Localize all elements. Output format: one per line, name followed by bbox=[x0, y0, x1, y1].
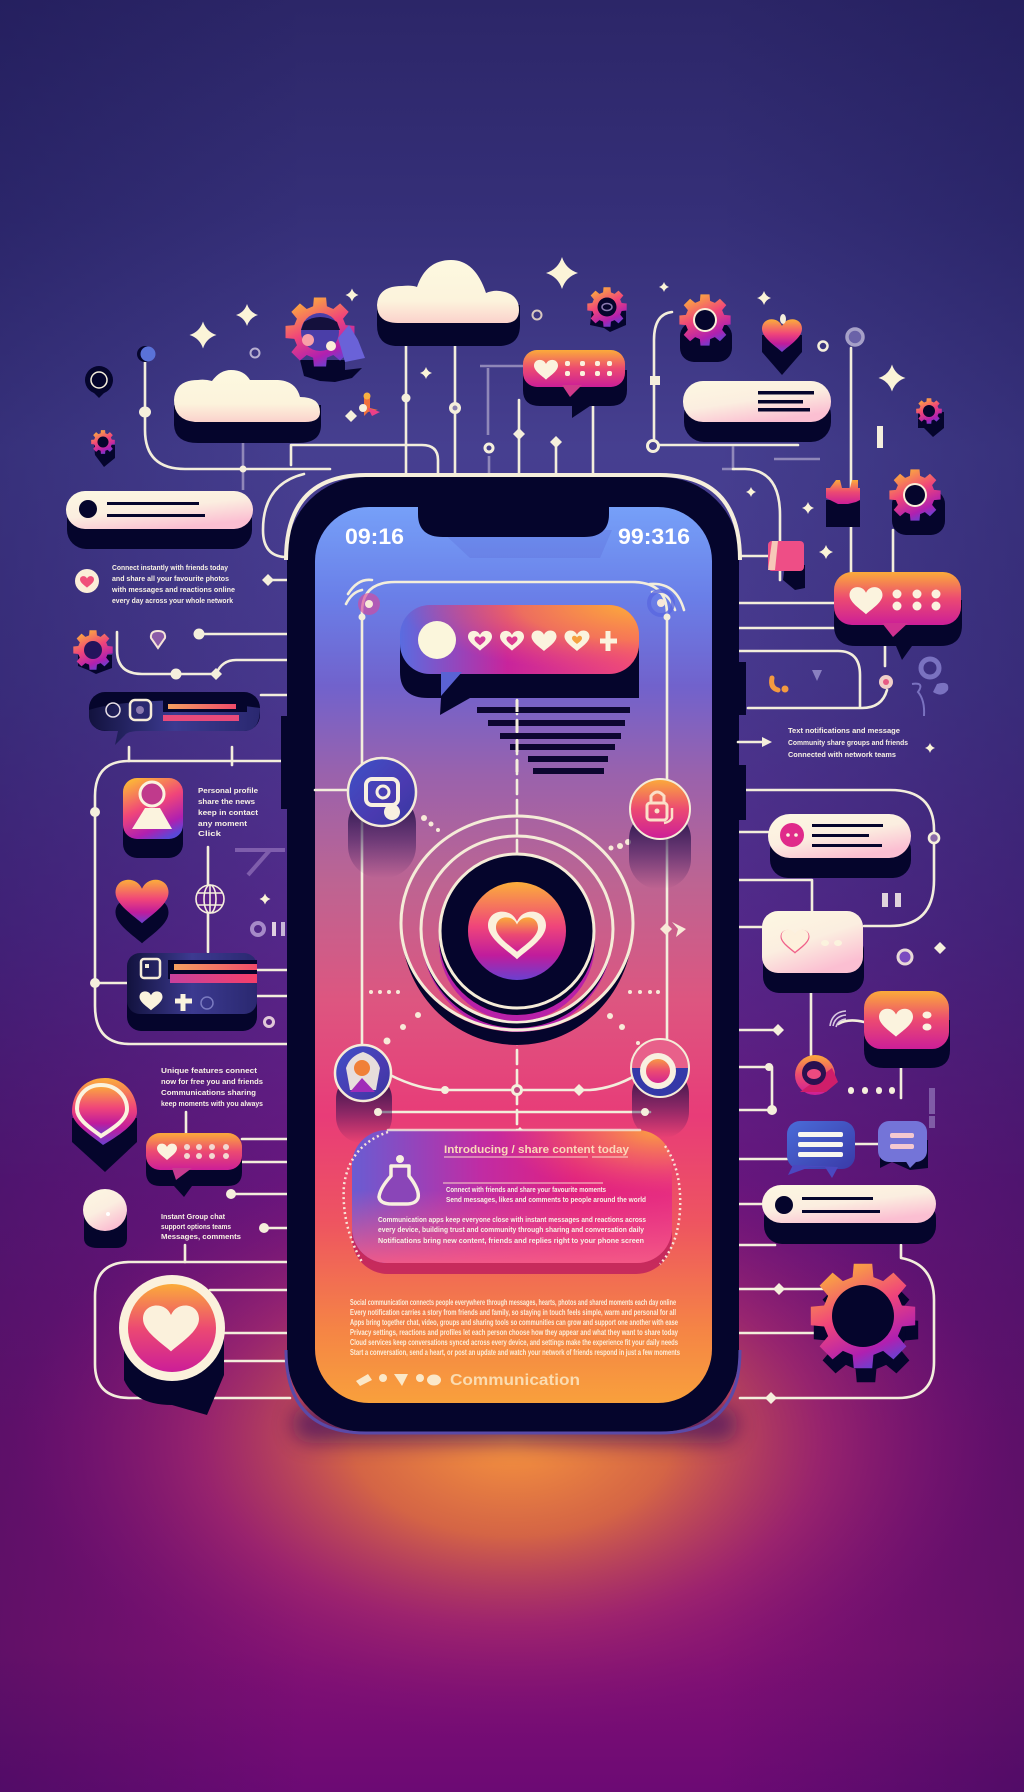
screen paragraph text: Privacy settings, reactions and profiles let each person choose how they appear and what they want to share today bbox=[350, 1328, 679, 1337]
line nodes on screen bbox=[374, 1084, 649, 1139]
small gear: far right bbox=[916, 398, 944, 437]
pill: top left bbox=[66, 491, 253, 549]
text block: left lower: Unique features connect bbox=[161, 1066, 257, 1075]
phone screen bbox=[315, 507, 712, 1403]
text block: left profile: Personal profile bbox=[198, 786, 258, 795]
dots row bbox=[848, 1087, 895, 1094]
icon: heart badge bbox=[75, 569, 99, 593]
text block: left upper bbox=[111, 563, 235, 605]
card body text: every device, building trust and community through sharing and conversation daily bbox=[378, 1225, 645, 1234]
screen paragraph text: Apps bring together chat, video, groups and sharing tools so communities can grow and support one another with ease bbox=[350, 1318, 678, 1327]
text block: left lower bbox=[161, 1066, 263, 1108]
screen frame lines bbox=[315, 580, 684, 1150]
node: profile bbox=[335, 1045, 392, 1143]
node: lock bbox=[629, 779, 691, 889]
information card bbox=[344, 1130, 680, 1274]
grey bars bbox=[929, 1088, 935, 1128]
text block: left bottom: support options teams bbox=[161, 1222, 231, 1231]
phone body bbox=[281, 475, 746, 1433]
gear: left bbox=[73, 630, 113, 674]
small decorations: top left bbox=[85, 346, 380, 422]
ring: right bbox=[898, 942, 946, 964]
circuit lines: left middle and bottom bbox=[90, 747, 290, 1398]
cloud: left bbox=[174, 370, 321, 443]
icon: wifi waves bbox=[830, 1011, 846, 1027]
pill: bottom right bbox=[762, 1185, 936, 1244]
big heart badge bbox=[119, 1275, 225, 1415]
screen footer icons bbox=[356, 1374, 441, 1386]
text block: right: Text notifications and message bbox=[788, 726, 900, 735]
circuit lines: right middle and bottom bbox=[738, 790, 939, 1404]
grey seven mark bbox=[235, 850, 285, 875]
small ring: left bbox=[264, 1018, 274, 1026]
heart card bbox=[762, 911, 864, 993]
gear with magnifier: top left bbox=[286, 298, 365, 382]
text block: left profile: any moment bbox=[198, 819, 248, 828]
screen paragraph text: Social communication connects people everywhere through messages, hearts, photos and shared moments each day online bbox=[350, 1298, 676, 1307]
text block: left lower: keep moments with you always bbox=[161, 1099, 263, 1108]
blue chat bubble bbox=[787, 1121, 855, 1178]
status time right: 99:316 bbox=[618, 524, 690, 549]
screen paragraph text: Cloud services keep conversations synced across every device, and settings make the experience fit your daily needs bbox=[350, 1338, 678, 1347]
text block: left lower: Communications sharing bbox=[161, 1088, 256, 1097]
arrow bbox=[738, 737, 772, 747]
text block: left profile: Click bbox=[198, 829, 222, 838]
main chat bubble bbox=[400, 605, 639, 715]
circuit lines: top right bbox=[513, 312, 893, 708]
periwinkle chat bubble bbox=[878, 1121, 928, 1170]
gear: right bbox=[889, 469, 945, 535]
dotted guide lines bbox=[369, 815, 686, 1045]
chat text lines bbox=[477, 700, 630, 780]
heart bubble: right bbox=[834, 572, 962, 660]
bars bbox=[882, 893, 901, 907]
card body text bbox=[378, 1185, 646, 1245]
avatar tile bbox=[123, 778, 183, 858]
text block: left profile: keep in contact bbox=[198, 808, 259, 817]
text block: right: Community share groups and friends bbox=[788, 738, 908, 747]
card title: Introducing / share content today bbox=[444, 1144, 630, 1156]
sparkles bbox=[190, 257, 935, 904]
heart: top right bbox=[762, 314, 802, 375]
text block: left bottom bbox=[161, 1212, 241, 1241]
icon: globe bbox=[196, 885, 224, 913]
icon: location pin small bbox=[151, 631, 165, 648]
text block: left upper: with messages and reactions online bbox=[111, 585, 235, 594]
pink tab bbox=[768, 541, 805, 590]
text block: left bottom: Instant Group chat bbox=[161, 1212, 225, 1221]
card body text: Connect with friends and share your favourite moments bbox=[446, 1185, 606, 1194]
circuit lines: top left bbox=[117, 346, 530, 695]
screen paragraph text: Every notification carries a story from friends and family, so staying in touch feels simple, warm and personal for all bbox=[350, 1308, 676, 1317]
text block: right: Connected with network teams bbox=[788, 750, 896, 759]
gear pin bbox=[795, 1055, 838, 1095]
heart bubble: left bbox=[146, 1133, 242, 1197]
text block: left profile bbox=[198, 786, 259, 838]
pink flat gear bbox=[826, 480, 860, 527]
dark status card bbox=[127, 953, 257, 1031]
cloud: top center bbox=[377, 260, 520, 346]
card body text: Send messages, likes and comments to people around the world bbox=[446, 1195, 646, 1204]
small decorations: right bbox=[772, 659, 948, 716]
screen paragraph text bbox=[350, 1298, 680, 1357]
rings: top right bbox=[250, 310, 863, 358]
text block: left profile: share the news bbox=[198, 797, 255, 806]
dark chat card bbox=[89, 692, 260, 745]
small gear: top center bbox=[587, 287, 627, 332]
text block: right bbox=[788, 726, 908, 759]
pill: right with pink dot bbox=[768, 814, 911, 878]
text block: left upper: Connect instantly with friends today bbox=[112, 563, 229, 572]
big gear bbox=[811, 1264, 918, 1382]
text block: left bottom: Messages, comments bbox=[161, 1232, 241, 1241]
heart: left bbox=[116, 880, 168, 943]
node: ring bbox=[631, 1039, 689, 1138]
text block: left upper: and share all your favourite photos bbox=[112, 574, 229, 583]
notch bbox=[418, 505, 612, 558]
status time left: 09:16 bbox=[345, 524, 404, 549]
pill: top right bbox=[683, 381, 831, 442]
gear: top right bbox=[679, 294, 732, 362]
location pin: large bbox=[72, 1078, 137, 1172]
text block: left lower: now for free you and friends bbox=[161, 1077, 263, 1086]
footer label: Communication bbox=[450, 1372, 580, 1389]
phone ground shadow bbox=[292, 1405, 738, 1443]
central heart target bbox=[401, 816, 633, 1045]
icon: bell bbox=[379, 1155, 418, 1204]
card body text: Communication apps keep everyone close with instant messages and reactions across bbox=[378, 1215, 646, 1224]
heart bubble: right lower bbox=[864, 991, 950, 1068]
small gear: far left bbox=[91, 430, 115, 467]
heart bubble: top center bbox=[523, 350, 627, 418]
ring and bars bbox=[252, 922, 285, 936]
node: camera bbox=[348, 758, 416, 878]
text block: left upper: every day across your whole network bbox=[112, 596, 234, 605]
screen paragraph text: Start a conversation, send a heart, or post an update and watch your network of friends respond in just a few moments bbox=[350, 1348, 680, 1357]
cream ball bbox=[83, 1189, 127, 1248]
card body text: Notifications bring new content, friends and replies right to your phone screen bbox=[378, 1236, 644, 1245]
